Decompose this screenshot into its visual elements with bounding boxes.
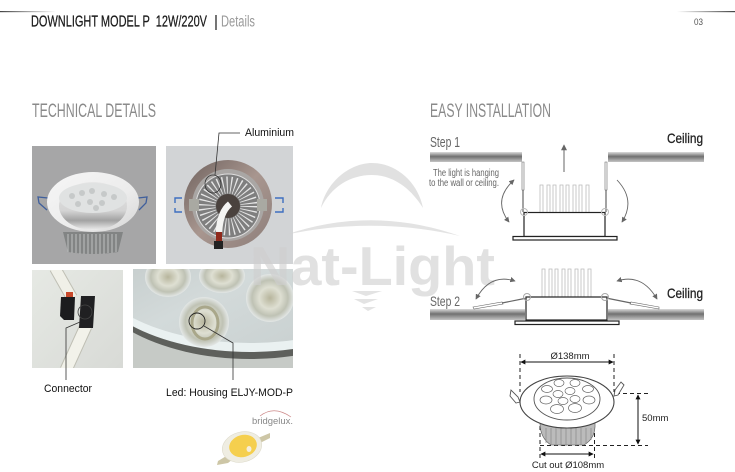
step 1 diagram [429, 130, 704, 240]
callout: connector [44, 305, 92, 395]
page title: | [214, 14, 218, 30]
dimension drawing: Ø138mm [550, 351, 590, 362]
callout: aluminium: Aluminium [245, 127, 294, 139]
header rule right [677, 11, 735, 12]
bridgelux logo: bridgelux. [252, 416, 293, 426]
dimension drawing: 50mm [642, 413, 668, 424]
page title: Details [221, 14, 255, 30]
step 2 diagram: Ceiling [667, 285, 703, 301]
callout: LED housing: Led: Housing ELJY-MOD-P [166, 387, 293, 399]
callout: aluminium [205, 127, 294, 193]
watermark: Nat-Light logo: Nat-Light [250, 235, 495, 297]
header rule left [0, 11, 56, 12]
dimension drawing: Cut out Ø108mm [532, 460, 604, 471]
step 1 diagram: Step 1 [430, 134, 460, 151]
watermark: Nat-Light logo [250, 163, 495, 311]
page number: 03 [694, 17, 703, 27]
step 1 diagram: to the wall or ceiling. [429, 178, 499, 189]
heading: technical details: TECHNICAL DETAILS [32, 101, 156, 122]
step 2 diagram: Step 2 [430, 293, 460, 309]
bridgelux logo [252, 411, 293, 426]
step 2 diagram [430, 269, 704, 324]
callout: connector: Connector [44, 383, 92, 395]
page title: DOWNLIGHT MODEL P 12W/220V [31, 14, 207, 30]
photo: connector [32, 268, 123, 370]
dimension drawing [510, 351, 668, 471]
callout: LED housing [166, 313, 293, 399]
photo: downlight back with aluminium heat sink [166, 146, 293, 264]
LED chip [217, 427, 270, 467]
photo: downlight front [32, 146, 156, 264]
step 1 diagram: The light is hanging [433, 168, 499, 179]
step 1 diagram: Ceiling [667, 130, 703, 146]
photo: LED lenses [133, 269, 293, 368]
heading: easy installation: EASY INSTALLATION [430, 101, 551, 122]
